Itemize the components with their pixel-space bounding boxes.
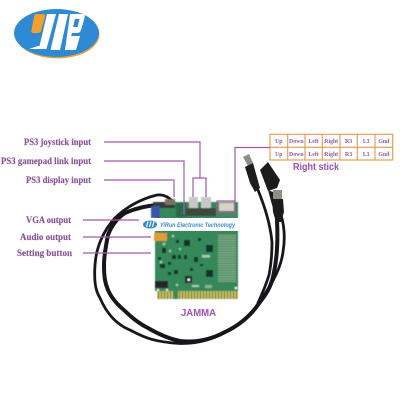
- right stick pin table: Up: [275, 152, 283, 158]
- chips: [158, 238, 213, 277]
- right stick pin table: L3: [363, 152, 370, 158]
- connector: black adapter and USB plug right: [260, 162, 284, 222]
- right stick pin table: Gnd: [378, 152, 390, 158]
- right stick pin table: [270, 134, 393, 160]
- right stick pin table: Left: [308, 139, 319, 145]
- right stick header: [219, 203, 234, 211]
- right stick pin table: L3: [363, 139, 370, 145]
- right stick pin table: Right: [324, 152, 338, 158]
- right stick pin table: R3: [345, 139, 352, 145]
- audio jack: [154, 233, 167, 241]
- cables: [95, 190, 284, 344]
- connector: USB plug left: [243, 154, 260, 192]
- label: Setting button: Setting button: [17, 248, 72, 258]
- label: PS3 display input: PS3 display input: [26, 175, 91, 185]
- right stick pin table: Down: [289, 139, 304, 145]
- label: JAMMA: JAMMA: [181, 308, 216, 319]
- right stick pin table: Left: [308, 152, 319, 158]
- setting button: [185, 276, 192, 283]
- power jack: [155, 281, 168, 288]
- right stick pin table: Down: [289, 152, 304, 158]
- right stick pin table: R3: [345, 152, 352, 158]
- purple leader lines: [83, 142, 270, 253]
- label: VGA output: VGA output: [26, 215, 71, 225]
- small board components: [157, 235, 237, 291]
- right stick pin table: Right: [324, 139, 338, 145]
- resistor rows: [218, 234, 236, 282]
- top connectors area: [153, 199, 236, 218]
- PS3 USB ports: [189, 197, 211, 208]
- banner text: YiRun Electronic Technology: [160, 223, 236, 229]
- label: Audio output: Audio output: [20, 232, 71, 242]
- PCB board: [151, 197, 238, 299]
- right stick pin table: Up: [275, 139, 283, 145]
- white banner: [139, 218, 239, 231]
- banner logo: [143, 220, 157, 228]
- edge connector fingers: [157, 291, 238, 299]
- VGA port: [151, 206, 160, 218]
- label: PS3 joystick input: PS3 joystick input: [24, 137, 91, 147]
- label: Right stick: Right stick: [293, 162, 339, 173]
- label: PS3 gamepad link input: PS3 gamepad link input: [1, 156, 91, 166]
- right stick pin table: Gnd: [378, 139, 390, 145]
- logo: [14, 9, 100, 58]
